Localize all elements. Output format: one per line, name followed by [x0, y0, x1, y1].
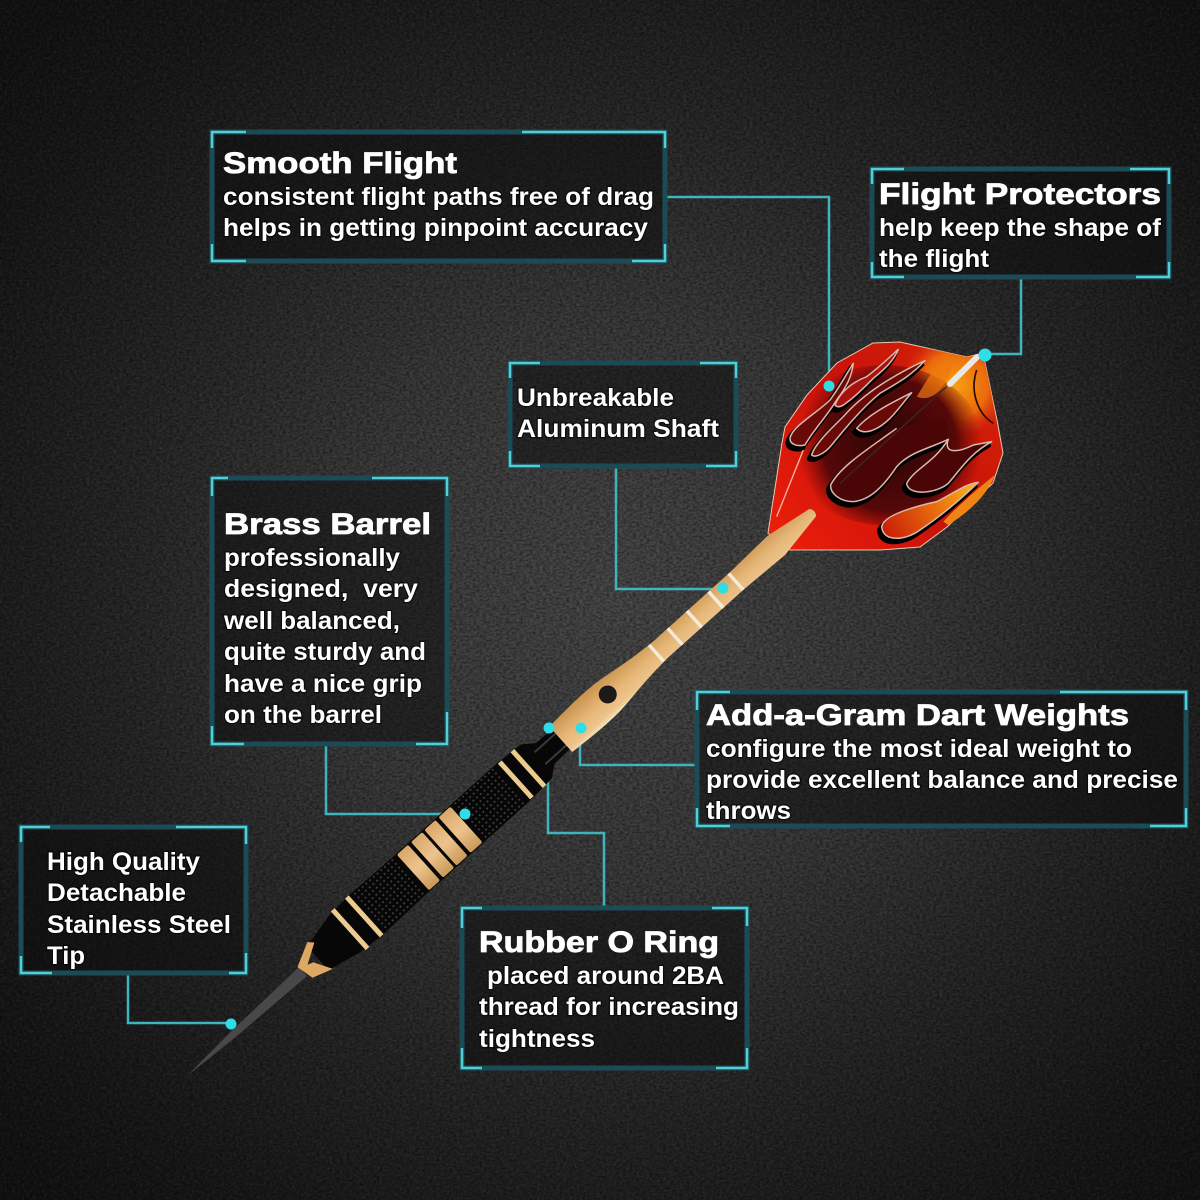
body text: on the barrel [224, 701, 382, 729]
needle tip [183, 967, 307, 1080]
panel: rubber o ring [462, 908, 747, 1068]
knurled grip [353, 768, 525, 930]
flames [777, 349, 995, 542]
connector dots [226, 348, 992, 1030]
body text: have a nice grip [224, 670, 422, 698]
body text: Tip [47, 942, 85, 970]
panel: brass barrel [212, 478, 447, 744]
body text [223, 183, 654, 242]
body text: configure the most ideal weight to [706, 735, 1132, 763]
body text: provide excellent balance and precise [706, 766, 1178, 794]
body text [517, 384, 720, 443]
large centre flame [831, 420, 948, 502]
flight protector [950, 357, 977, 384]
body text: placed around 2BA [487, 962, 724, 990]
heading: Add-a-Gram Dart Weights [706, 699, 1129, 732]
shaft [548, 497, 827, 754]
body text: Unbreakable [517, 384, 674, 412]
gold grip bands [397, 807, 482, 890]
body text: High Quality [47, 848, 200, 876]
flight shape [768, 342, 1003, 550]
panel: flight protectors [872, 169, 1169, 277]
dark flame centre [787, 365, 983, 525]
thin gold rings [331, 748, 548, 950]
body text: professionally [224, 544, 400, 572]
orange top area [900, 342, 997, 440]
body text: Stainless Steel [47, 911, 231, 939]
connector lines [128, 197, 1021, 1023]
body text: Detachable [47, 879, 186, 907]
body text [479, 962, 739, 1053]
gold nose [289, 939, 336, 986]
panel: add-a-gram weights [697, 692, 1186, 826]
panel: unbreakable shaft [510, 363, 736, 466]
barrel body [300, 718, 580, 978]
body text: Aluminum Shaft [517, 415, 720, 443]
body text [706, 735, 1178, 825]
body text: thread for increasing [479, 993, 739, 1021]
heading: Brass Barrel [224, 508, 431, 541]
body text [47, 848, 231, 970]
body text [879, 214, 1162, 273]
dart flight [768, 342, 1003, 550]
body text: helps in getting pinpoint accuracy [223, 214, 648, 242]
body text: tightness [479, 1025, 595, 1053]
O ring prongs [535, 731, 568, 764]
body text: quite sturdy and [224, 638, 426, 666]
body text: the flight [879, 245, 990, 273]
heading: Rubber O Ring [479, 926, 719, 959]
shaft hole [595, 682, 620, 707]
panel: smooth flight [212, 132, 665, 261]
panel: stainless steel tip [21, 827, 246, 973]
dart barrel, shaft and tip [170, 492, 832, 1095]
body text: designed, very [224, 575, 418, 603]
body text: consistent flight paths free of drag [223, 183, 654, 211]
body text: help keep the shape of [879, 214, 1162, 242]
body text: throws [706, 797, 791, 825]
body text [223, 544, 426, 729]
heading: Flight Protectors [879, 178, 1161, 211]
heading: Smooth Flight [223, 147, 457, 180]
shaft rings [648, 572, 745, 663]
body text: well balanced, [223, 607, 400, 635]
